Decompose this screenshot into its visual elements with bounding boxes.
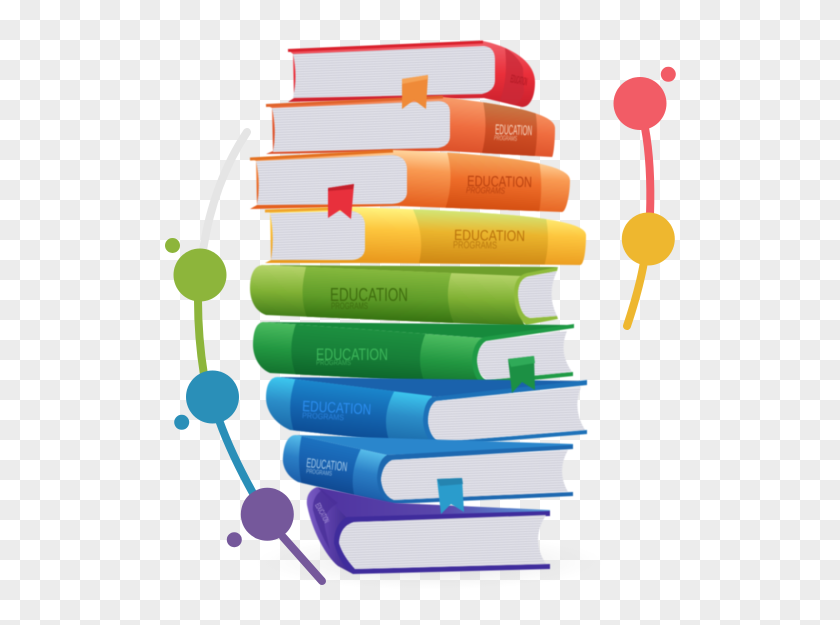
front cover rim	[423, 380, 587, 446]
top cover face	[296, 435, 573, 455]
spine band	[500, 48, 524, 105]
dot: green	[165, 238, 180, 253]
bookmark: green	[508, 356, 535, 393]
left timeline	[165, 132, 322, 581]
top cover face	[278, 377, 587, 397]
spine text: EDUCATION	[306, 455, 348, 474]
spine text: EDUCATION	[454, 227, 525, 245]
node: red	[614, 77, 666, 130]
dot: purple	[227, 532, 242, 547]
book: blue	[265, 376, 588, 442]
text: EDUCATION	[509, 73, 529, 88]
pages	[339, 515, 546, 569]
spine text: EDUCATION	[467, 173, 532, 191]
front cover rim	[472, 324, 574, 385]
book: purple	[307, 487, 550, 574]
pages	[270, 211, 365, 260]
top cover face	[317, 487, 550, 520]
spine text: EDUCATION	[330, 285, 408, 305]
cover and spine	[265, 207, 586, 265]
connector: purple line	[283, 537, 322, 581]
spine band	[413, 209, 548, 265]
book: light green	[249, 264, 558, 326]
bookmark: blue	[437, 478, 464, 514]
spine band	[298, 436, 361, 494]
pages	[381, 450, 568, 500]
connector: green line	[198, 300, 204, 375]
pages	[518, 271, 557, 318]
node: purple	[241, 488, 294, 541]
cover and spine	[288, 41, 535, 107]
spine text: EDUCATION	[316, 345, 388, 364]
node: yellow	[622, 212, 675, 266]
book: orange-red: PROGRAMS	[494, 135, 517, 143]
spine band	[302, 266, 454, 324]
bookmark: orange	[402, 75, 428, 109]
pages	[256, 155, 407, 205]
spine	[283, 435, 392, 504]
book: red	[288, 41, 535, 107]
book: blue: PROGRAMS	[302, 411, 344, 422]
top cover face	[263, 322, 573, 338]
book: light green: PROGRAMS	[331, 301, 368, 311]
front cover rim	[334, 511, 550, 574]
book: orange: PROGRAMS	[466, 185, 505, 196]
front cover rim	[514, 267, 558, 325]
spine text: EDUCATION	[302, 398, 372, 419]
pages	[428, 387, 585, 442]
connector: red line	[645, 128, 650, 215]
book: orange-red	[265, 95, 556, 158]
dot: red	[661, 67, 676, 82]
spine band	[313, 490, 338, 550]
pages	[477, 331, 572, 380]
node: blue	[186, 370, 239, 424]
connector: blue line	[219, 420, 254, 495]
connector: grey arc	[203, 132, 247, 250]
dot: blue	[174, 415, 189, 430]
spine band	[482, 102, 538, 156]
spine	[253, 322, 482, 384]
right timeline	[614, 67, 676, 326]
spine text: EDUCATION	[313, 502, 331, 525]
book: dark green: PROGRAMS	[316, 360, 351, 367]
spine	[307, 487, 353, 574]
book: yellow	[265, 203, 586, 270]
pages	[272, 101, 450, 152]
cover edge	[288, 42, 483, 50]
connector: yellow line	[627, 262, 644, 326]
spine	[250, 265, 525, 326]
cover edge	[250, 151, 393, 159]
spine band	[291, 324, 426, 379]
front cover rim	[377, 445, 573, 504]
book: mid blue	[283, 430, 573, 505]
top cover face	[262, 265, 558, 277]
cover and spine	[250, 150, 570, 212]
node: green	[174, 248, 226, 302]
spine band	[290, 378, 394, 438]
cover edge	[265, 208, 350, 211]
book: orange	[249, 148, 571, 213]
pages	[293, 46, 495, 98]
book: yellow: PROGRAMS	[453, 240, 497, 252]
cover edge	[266, 97, 443, 106]
bookmark: red	[328, 184, 354, 219]
book: orange-red: EDUCATION	[495, 121, 532, 138]
cover and spine	[266, 97, 555, 157]
spine band	[446, 152, 542, 212]
floor shadow	[255, 534, 605, 590]
spine	[266, 377, 437, 446]
book: mid blue: PROGRAMS	[306, 468, 333, 478]
book: dark green	[252, 321, 575, 381]
